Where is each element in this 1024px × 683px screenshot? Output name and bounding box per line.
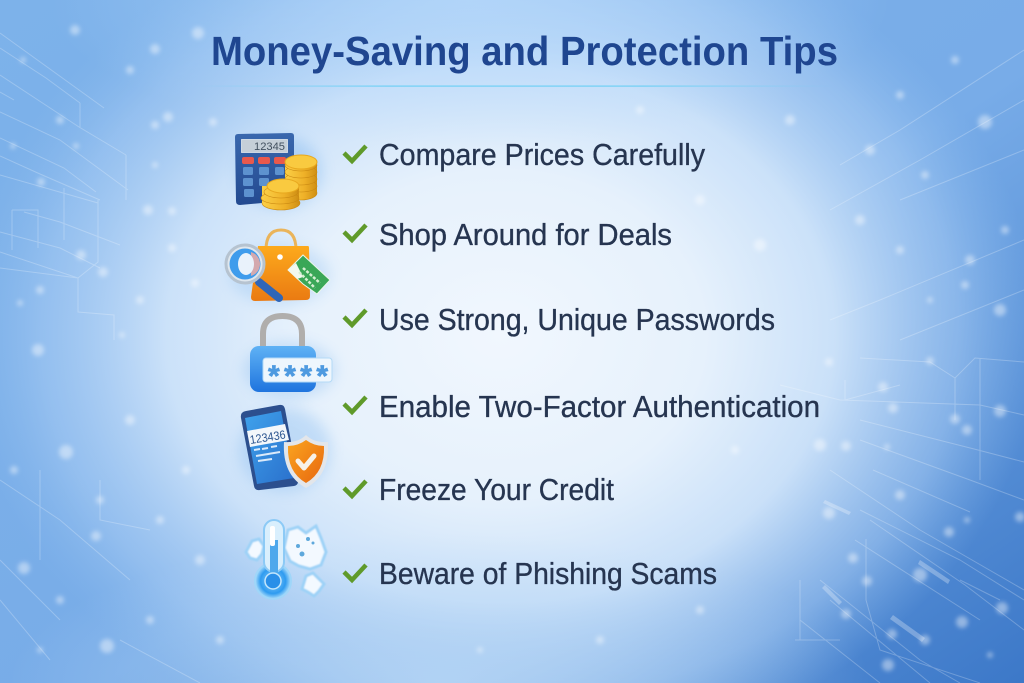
icon: smartphone with code and shield [239, 405, 331, 492]
title: Money-Saving and Protection Tips [211, 28, 838, 74]
list item: two-factor authentication: Enable Two-Factor Authentication [379, 389, 820, 424]
icon: calculator and coins: 12345 [254, 141, 285, 153]
list item: phishing scams: Beware of Phishing Scams [379, 556, 717, 591]
list item: strong passwords: Use Strong, Unique Passwords [379, 302, 775, 337]
icon: padlock with password field: **** [268, 360, 328, 393]
icon: padlock with password field [244, 316, 336, 398]
icon: thermometer and snowflakes [246, 520, 326, 599]
icon: calculator and coins [235, 133, 322, 210]
list item: compare prices: Compare Prices Carefully [379, 137, 705, 172]
title divider [195, 86, 835, 87]
icon: smartphone with code and shield: 123436 [249, 427, 287, 447]
list item: freeze credit: Freeze Your Credit [379, 472, 614, 507]
list item: shop around: Shop Around for Deals [379, 217, 672, 252]
icon: shopping bag, magnifier and price tag [226, 230, 330, 305]
